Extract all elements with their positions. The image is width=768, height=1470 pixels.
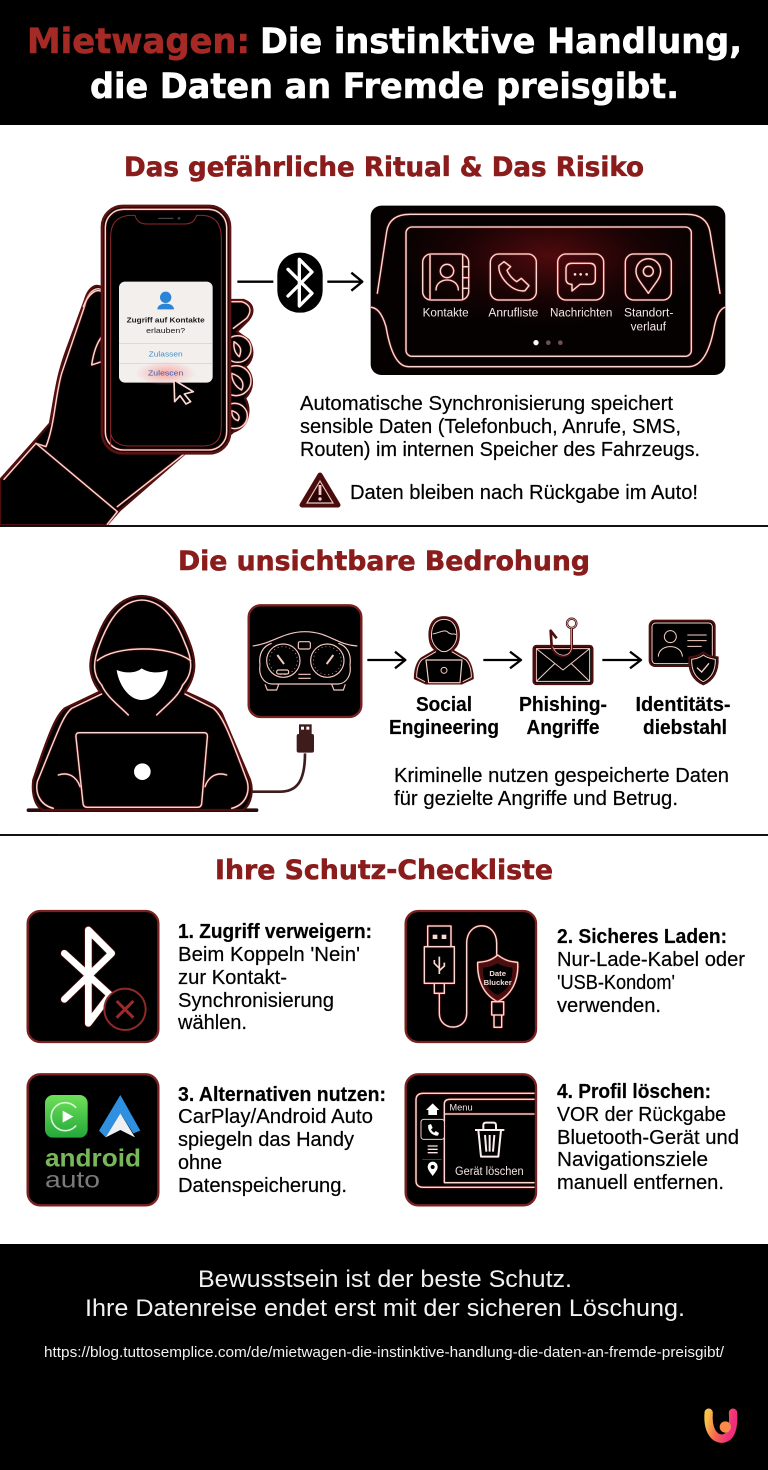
text: step 4: 4. Profil löschen: [557, 1081, 711, 1103]
text: step 2: Nur-Lade-Kabel oder [557, 949, 745, 971]
title: Mietwagen: [27, 22, 250, 62]
icon: cursor [174, 380, 193, 404]
text: step 2: 2. Sicheres Laden: [557, 926, 727, 948]
text: step 4: VOR der Rückgabe [557, 1104, 726, 1126]
text: synchronisation explanation: Routen) im internen Speicher des Fahrzeugs. [300, 439, 700, 461]
icon: usb data blocker: Blucker [484, 978, 512, 987]
source url: https://blog.tuttosemplice.com/de/mietwagen-die-instinktive-handlung-die-daten-an-fremde-preisgibt/ [44, 1344, 725, 1361]
illustration: hooded hacker [27, 596, 258, 812]
hand [0, 286, 252, 525]
text: step 3: CarPlay/Android Auto [178, 1106, 373, 1128]
text: step 2: verwenden. [557, 995, 661, 1017]
icon: location [625, 254, 671, 300]
flow labels: Phishing- [519, 694, 607, 716]
header banner [0, 0, 768, 125]
icon: warning triangle [302, 475, 338, 505]
icon: social engineering [415, 617, 473, 683]
icon: contacts [423, 254, 469, 300]
heading: invisible threat: Die unsichtbare Bedrohung [178, 546, 590, 577]
icon: carplay and android auto [28, 1074, 158, 1205]
text: synchronisation explanation [300, 393, 700, 461]
permission dialog: Zulescen [148, 369, 183, 378]
text: step 3: Datenspeicherung. [178, 1175, 347, 1197]
process flow: attack chain [367, 617, 718, 684]
text: synchronisation explanation: Automatische Synchronisierung speichert [300, 393, 673, 415]
title: die Daten an Fremde preisgibt. [90, 67, 679, 107]
icon: carplay and android auto: auto [45, 1166, 100, 1192]
heading: ritual and risk: Das gefährliche Ritual & Das Risiko [124, 152, 644, 183]
icon: phone [490, 254, 536, 300]
screen labels: Standort- [624, 306, 673, 320]
text: step 3: spiegeln das Handy [178, 1129, 354, 1151]
title: Die instinktive Handlung, [260, 22, 742, 62]
flow labels: Identitäts- [636, 694, 730, 716]
text: step 4: manuell entfernen. [557, 1172, 724, 1194]
flow labels [389, 694, 730, 739]
text: step 4 [557, 1081, 739, 1194]
text: step 1 [177, 921, 372, 1034]
text: step 2 [557, 926, 745, 1017]
title [27, 22, 742, 107]
flow labels: diebstahl [643, 717, 727, 739]
closing message: Ihre Datenreise endet erst mit der sicheren Löschung. [85, 1295, 685, 1322]
text: criminal use [394, 765, 729, 810]
closing message [85, 1266, 685, 1322]
text: step 4: Navigationsziele [557, 1149, 708, 1171]
usb cable [252, 724, 314, 792]
icon: contact [157, 292, 174, 309]
laptop [76, 733, 207, 807]
flow labels: Angriffe [526, 717, 600, 739]
arrow [602, 652, 641, 668]
icon: phishing mail [534, 619, 592, 684]
checklist 1: deny access [28, 911, 372, 1042]
fingers [224, 336, 251, 362]
screen labels: Kontakte [423, 306, 469, 320]
screen labels: Nachrichten [550, 306, 612, 320]
illustration: hand holding phone [0, 206, 252, 525]
heading: checklist: Ihre Schutz-Checkliste [215, 855, 553, 886]
icon: delete device menu: Gerät löschen [455, 1164, 524, 1178]
permission dialog: erlauben? [146, 326, 185, 335]
text: step 4: Bluetooth-Gerät und [557, 1127, 739, 1149]
checklist 2: safe charging [406, 911, 745, 1042]
text: synchronisation explanation: sensible Daten (Telefonbuch, Anrufe, SMS, [300, 416, 681, 438]
icon: usb data blocker [406, 911, 536, 1042]
flow labels: Social [416, 694, 472, 716]
icon: carplay and android auto: android [45, 1145, 141, 1173]
footer banner [0, 1244, 768, 1470]
checklist 3: alternatives [28, 1074, 386, 1205]
warning callout: Daten bleiben nach Rückgabe im Auto! [350, 482, 698, 504]
permission dialog: Zugriff auf Kontakte [127, 316, 205, 325]
text: step 3: ohne [178, 1152, 222, 1174]
warning callout [302, 475, 698, 505]
arrow [367, 652, 405, 668]
permission dialog [119, 282, 213, 404]
icon: delete device menu [406, 1074, 536, 1205]
icon: message [558, 254, 604, 300]
text: step 1: Beim Koppeln 'Nein' [178, 944, 360, 966]
connector: bluetooth arrow [237, 253, 362, 313]
panel: car dashboard [249, 605, 361, 717]
text: step 2: 'USB-Kondom' [557, 972, 675, 994]
text: step 1: zur Kontakt- [178, 967, 287, 989]
text: step 3 [178, 1084, 386, 1197]
mask face [117, 668, 168, 700]
icon: usb data blocker: Date [489, 969, 506, 978]
screen labels [423, 306, 673, 334]
icon: delete device menu: Menu [449, 1103, 473, 1113]
phone [102, 206, 230, 453]
icon: bluetooth off [28, 911, 158, 1042]
checklist 4: delete profile [406, 1074, 739, 1205]
screen labels: Anrufliste [488, 306, 539, 320]
text: step 3: 3. Alternativen nutzen: [178, 1084, 386, 1106]
icon: identity card [650, 621, 718, 684]
flow labels: Engineering [389, 717, 499, 739]
text: criminal use: Kriminelle nutzen gespeicherte Daten [394, 765, 729, 787]
screen labels: verlauf [631, 320, 667, 334]
text: criminal use: für gezielte Angriffe und Betrug. [394, 788, 678, 810]
text: step 1: 1. Zugriff verweigern: [178, 921, 372, 943]
panel: car infotainment screen [371, 206, 725, 375]
closing message: Bewusstsein ist der beste Schutz. [198, 1266, 572, 1293]
text: step 1: wählen. [177, 1012, 247, 1034]
permission dialog: Zulassen [149, 349, 183, 358]
logo [708, 1413, 733, 1439]
text: step 1: Synchronisierung [178, 990, 334, 1012]
arrow [483, 652, 521, 668]
